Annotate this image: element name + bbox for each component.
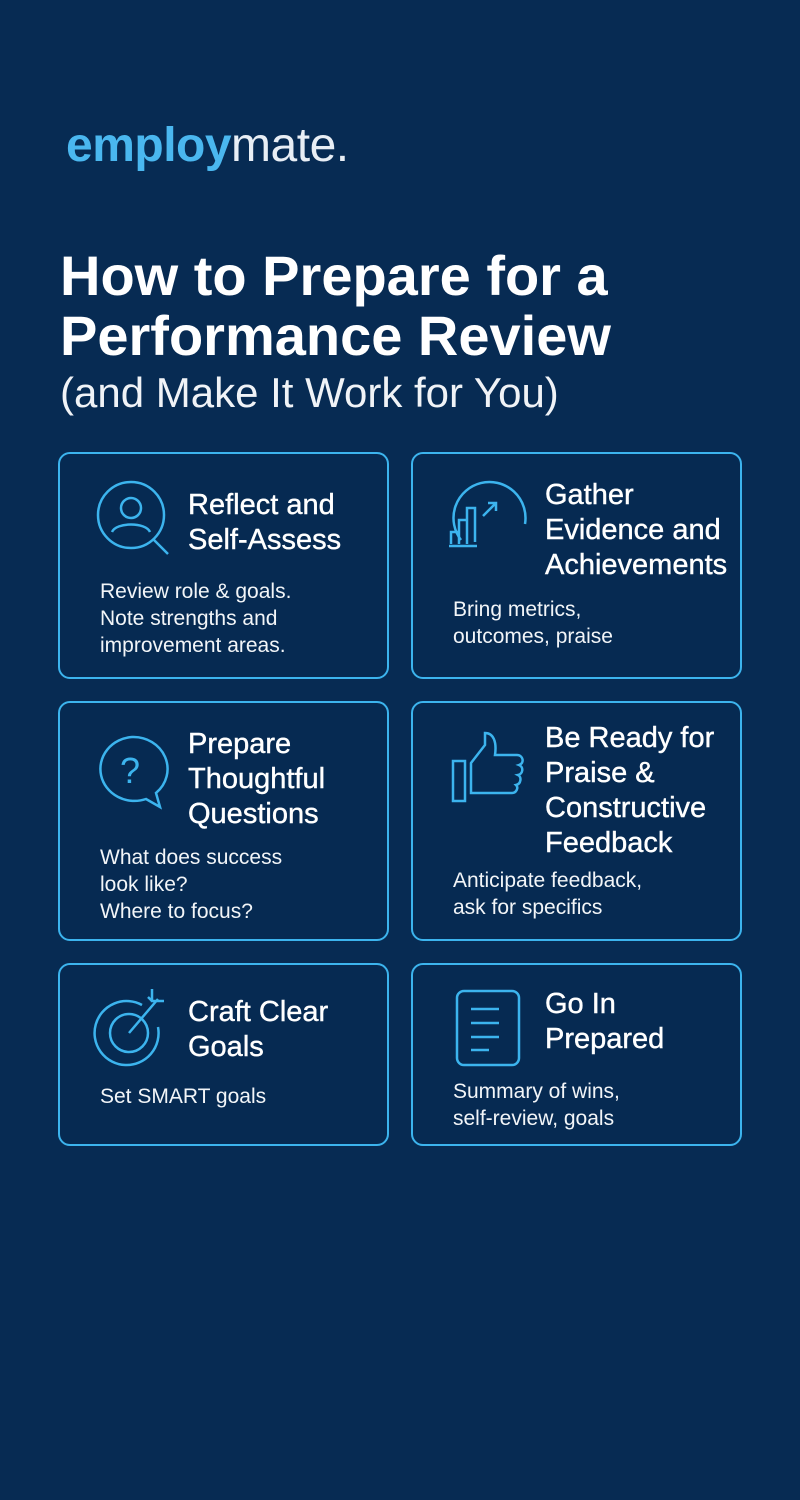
heading: Self-Assess (188, 524, 341, 556)
text (100, 580, 291, 657)
heading (545, 988, 664, 1055)
icon: magnifier person (96, 480, 169, 555)
panel: gather (411, 452, 742, 679)
text (453, 1080, 620, 1130)
heading: Achievements (545, 549, 727, 581)
text: ask for specifics (453, 896, 602, 919)
icon: thumbs up (452, 732, 524, 802)
icon: document (456, 990, 520, 1066)
title: Performance Review (60, 304, 611, 367)
heading (545, 722, 714, 859)
heading: Feedback (545, 827, 672, 859)
heading: Be Ready for (545, 722, 714, 754)
heading (188, 728, 325, 830)
heading: Thoughtful (188, 763, 325, 795)
icon: question bubble (99, 736, 169, 810)
heading: Goals (188, 1031, 264, 1063)
icon: question bubble: ? (120, 750, 140, 791)
heading: Evidence and (545, 514, 721, 546)
text (453, 869, 642, 919)
logo: employmate. (66, 119, 349, 172)
heading: Praise & (545, 757, 655, 789)
panel: feedback (411, 701, 742, 941)
icon: chart (449, 480, 527, 548)
panel: goals (58, 963, 389, 1146)
panel: prepared (411, 963, 742, 1146)
panel: questions (58, 701, 389, 941)
text: self-review, goals (453, 1107, 614, 1130)
text: Where to focus? (100, 900, 253, 923)
heading: Reflect and (188, 489, 335, 521)
text: Note strengths and (100, 607, 277, 630)
text: Anticipate feedback, (453, 869, 642, 892)
title (60, 244, 611, 367)
text (453, 598, 613, 648)
text: Bring metrics, (453, 598, 581, 621)
heading: Craft Clear (188, 996, 328, 1028)
text (100, 846, 282, 923)
heading (188, 996, 328, 1063)
text: look like? (100, 873, 188, 896)
panel: reflect (58, 452, 389, 679)
text: What does success (100, 846, 282, 869)
text: Review role & goals. (100, 580, 291, 603)
heading: Gather (545, 479, 634, 511)
heading: Constructive (545, 792, 706, 824)
text: outcomes, praise (453, 625, 613, 648)
text: improvement areas. (100, 634, 286, 657)
heading: Prepared (545, 1023, 664, 1055)
title: How to Prepare for a (60, 244, 608, 307)
subtitle: (and Make It Work for You) (60, 369, 559, 416)
text: Set SMART goals (100, 1085, 266, 1108)
heading: Prepare (188, 728, 291, 760)
heading (544, 479, 727, 581)
heading (188, 489, 341, 556)
heading: Go In (545, 988, 616, 1020)
text: Summary of wins, (453, 1080, 620, 1103)
icon: target (93, 989, 164, 1066)
heading: Questions (188, 798, 319, 830)
